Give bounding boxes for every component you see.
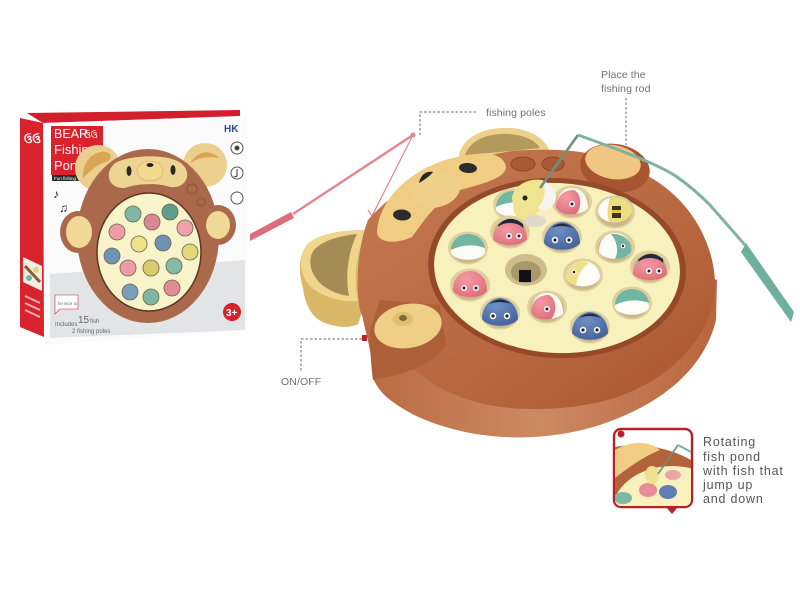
green fishing pole xyxy=(540,135,794,322)
box title block: BEAR xyxy=(54,127,88,141)
pond surface xyxy=(430,177,684,359)
speech badge xyxy=(55,295,78,314)
buttons xyxy=(187,184,205,206)
inset caption: Rotating xyxy=(703,435,756,449)
rod holder paw xyxy=(576,138,654,198)
box feature icons xyxy=(231,142,243,204)
music notes xyxy=(53,187,68,215)
box title block: ઉઉ xyxy=(84,130,98,140)
callout: place the fishing rod: fishing rod xyxy=(601,83,651,95)
inset caption: with fish that xyxy=(702,464,784,478)
box top flap xyxy=(27,110,240,123)
callout: on/off: ON/OFF xyxy=(281,376,321,388)
power switch xyxy=(362,335,367,341)
music notes: ♪ xyxy=(53,187,59,201)
pink fishing pole xyxy=(250,132,416,241)
product box xyxy=(20,110,247,345)
box title block xyxy=(51,126,103,181)
bear face xyxy=(126,161,176,181)
callout: place the fishing rod xyxy=(601,69,651,145)
bear mask band xyxy=(377,154,506,242)
bear nose xyxy=(409,166,465,214)
box title block: Pond xyxy=(54,158,84,173)
inset caption xyxy=(702,435,784,506)
front paw with on/off xyxy=(370,298,446,380)
empty center hole xyxy=(505,254,547,286)
callout: place the fishing rod: Place the xyxy=(601,69,646,81)
top buttons xyxy=(511,157,564,171)
includes text: 15 xyxy=(78,315,90,326)
callout: on/off xyxy=(281,339,362,388)
hooked yellow fish xyxy=(512,180,556,227)
bear ears xyxy=(75,143,227,191)
inset panel xyxy=(612,428,694,514)
side paws xyxy=(60,205,236,253)
small pond xyxy=(97,193,201,311)
age badge xyxy=(223,303,241,321)
toy body top face xyxy=(358,150,715,409)
age badge: 3+ xyxy=(226,308,238,319)
bear toy on box xyxy=(60,143,236,323)
pond rim xyxy=(423,171,691,365)
box red side panel xyxy=(20,118,44,337)
bear body xyxy=(77,149,219,323)
left cup xyxy=(300,230,367,327)
inset caption: fish pond xyxy=(703,450,761,464)
inset caption: and down xyxy=(703,492,764,506)
toy body side wall xyxy=(360,250,717,437)
box title block: Fishing xyxy=(54,142,96,157)
bear eyes xyxy=(393,162,477,221)
box front face xyxy=(43,116,247,345)
fish xyxy=(448,186,670,344)
includes text: Includes xyxy=(55,322,77,328)
box title block: Fun fishing xyxy=(54,176,77,181)
small fish xyxy=(104,204,198,305)
grey panel xyxy=(50,260,245,338)
callout: fishing poles xyxy=(420,107,546,135)
music notes: ♫ xyxy=(59,201,68,215)
includes text: fish xyxy=(90,319,99,325)
side illustration xyxy=(23,257,42,291)
brand logo: HK xyxy=(224,124,239,135)
back ear cup xyxy=(458,128,550,160)
speech badge: hi! nice to xyxy=(58,301,78,306)
includes text xyxy=(55,315,110,335)
side text lines xyxy=(25,296,40,317)
inset caption: jump up xyxy=(702,478,753,492)
side logo: ઉઉ xyxy=(24,132,41,146)
callout: fishing poles: fishing poles xyxy=(486,107,546,119)
includes text: 2 fishing poles xyxy=(72,329,110,335)
bear mask xyxy=(109,156,187,188)
